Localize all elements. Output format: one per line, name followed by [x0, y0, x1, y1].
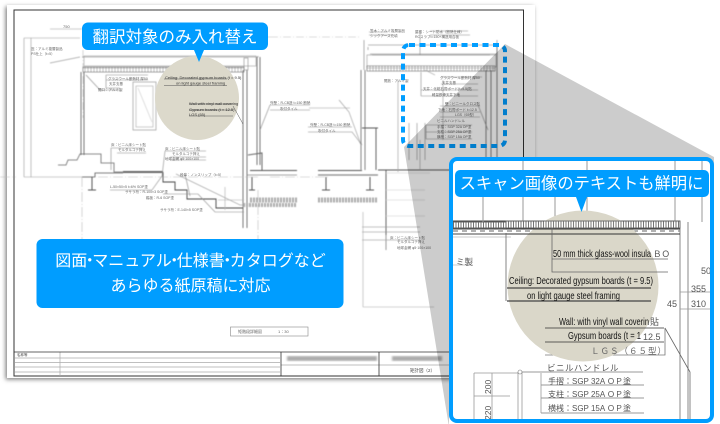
drawing labels: small text: 屋根：シート防水（断熱仕様） [415, 29, 464, 34]
drawing labels: small text: L-50×50×5 t=6% SOP塗 [110, 184, 148, 189]
drawing labels: small text: 笠木：アルミ複層製品 [370, 28, 405, 33]
drawing labels: small text: 踏板：R-6 SOP塗 [146, 195, 175, 200]
drawing labels: small text: 地球金網 φ5·100×100 [165, 156, 199, 161]
drawing labels: small text: 天井支基 [442, 80, 456, 85]
magnified panel [451, 159, 712, 421]
callout: translated text only: 翻訳対象のみ入れ替え [92, 28, 258, 46]
drawing labels: small text: 床：ビニル床シート貼 [165, 146, 200, 151]
drawing labels: small text: PS仕上（t=5） [31, 51, 55, 56]
tan circle: magnified: Wall: with vinyl wall coverin [559, 316, 649, 328]
callout: supports all paper documents: 図面・マニュアル・仕様書・カタログなど [55, 252, 326, 270]
drawing labels: small text [31, 24, 480, 334]
drawing labels: small text: 床：ビニル床シート貼 [390, 235, 425, 240]
magnification wedge [404, 44, 714, 424]
drawing labels: small text: 開放：アルミ製 [384, 78, 409, 83]
magnified labels: 355 [691, 284, 706, 294]
magnified labels: 45 [667, 299, 677, 309]
callout: scanned text stays sharp [455, 170, 709, 212]
title block: 名称等 [17, 352, 28, 357]
paper sheet [7, 5, 535, 378]
tan circle: magnified: ＬＧＳ（６５型） [591, 346, 667, 356]
drawing labels: small text: 支柱：SGP 25A OP塗 [437, 129, 472, 134]
magnified spot: left [155, 56, 243, 140]
drawing labels: small text: 750 [63, 24, 70, 29]
drawing labels: small text: ビニルハンドレル [437, 118, 465, 123]
drawing frame [14, 10, 524, 376]
magnified spot: left: Wall with vinyl wall covering [189, 101, 238, 106]
callout: scanned text stays sharp: スキャン画像のテキストも鮮明に [460, 175, 703, 193]
magnified labels: 200 [483, 380, 493, 394]
magnified labels: 50 [701, 266, 711, 276]
magnified drawing content [451, 160, 712, 421]
callout: supports all paper documents: あらゆる紙原稿に対応 [110, 277, 271, 295]
tan circle: magnified: ＢＯ [653, 249, 670, 259]
drawing labels: small text: 下地：石膏ボード t=12.5 [438, 107, 477, 112]
magnified spot: left: on light gauge steel framing [176, 80, 225, 86]
magnified labels: ビニルハンドレル [547, 363, 619, 373]
magnified labels [456, 257, 711, 420]
drawing labels: small text: 床：ビニル床シート貼 [111, 142, 146, 147]
tan circle: magnified: Ceiling: Decorated gypsum boards (t = 9.5) [509, 275, 653, 287]
drawing labels: small text: 天井：化粧石膏ボード(t=9.5)貼 [423, 86, 472, 91]
magnified labels: ミ製 [456, 257, 474, 267]
magnified labels: 支柱：SGP 25A ＯＰ塗 [548, 389, 631, 399]
drawing labels: small text: 横桟：SGP 15A OP塗 [437, 134, 472, 139]
drawing labels: small text: ササラ桁：E-140×5 SOP塗 [160, 207, 203, 212]
drawing labels: small text: モルタルコテ押え [172, 151, 200, 156]
blurred company names [287, 356, 442, 361]
drawing labels: small text: 開口：アルミ製 [98, 87, 123, 92]
table of dimensions [665, 328, 690, 421]
magnified spot: left: Ceiling: Decorated gypsum boards (t = 9.5) [165, 75, 242, 80]
title block [14, 352, 523, 376]
drawing labels: small text: 天井支基 [109, 81, 123, 86]
magnified labels: 手摺：SGP 32A ＯＰ塗 [548, 376, 631, 386]
drawing labels: small text: 手摺：SGP 32A OP塗 [437, 124, 472, 129]
tan circle: magnified: 50 mm thick glass-wool insula [553, 248, 651, 260]
drawing labels: small text: 外壁：R-CB造 t=150 断熱 [270, 100, 311, 105]
drawing labels: small text: 矩階段詳細図 1：30 [238, 328, 289, 334]
magnified spot: left: LGS (65) [189, 112, 206, 117]
drawing labels: small text: モルタルコテ押え [118, 147, 146, 152]
magnified labels: 横桟：SGP 15A ＯＰ塗 [548, 403, 631, 413]
drawing labels: small text: LGS（65型） [455, 112, 476, 117]
drawing labels: small text: グラスウール断熱材 厚50 [108, 76, 148, 81]
dashed highlight [403, 45, 505, 146]
drawing labels: small text: 外壁：R-CB造 t=150 断熱 [310, 122, 351, 127]
drawing labels: small text: 地球金網 φ5·100×100 [397, 245, 431, 250]
drawing labels: small text: 壁：ビニールクロス貼 [445, 101, 480, 106]
drawing labels: small text: 段鼻：ノンスリップ（t=5） [180, 172, 223, 177]
callout: translated text only [82, 22, 268, 62]
drawing labels: small text: 軽量鉄骨天井下地 [432, 92, 460, 97]
magnified labels: 310 [691, 299, 706, 309]
drawing labels: small text: 吹付タイル [280, 106, 298, 111]
sheet title box [230, 327, 308, 336]
section drawing: right [309, 31, 500, 307]
tan circle: magnified: 12.5 [643, 332, 661, 342]
title block: 矩計図（2） [410, 367, 435, 374]
stairs [58, 154, 123, 172]
drawing labels: small text: 吹付タイル [318, 128, 336, 133]
drawing labels: small text: グラスウール断熱材 厚50 [440, 75, 480, 80]
tan circle: magnified: 貼 [650, 316, 659, 327]
drawing labels: small text: シックアース充填 [370, 33, 398, 38]
magnified spot: left: Gypsum boards (t = 12.5) [189, 107, 235, 112]
section drawing: left [0, 29, 378, 300]
tan circle: magnified [506, 210, 680, 362]
callout: supports all paper documents [36, 239, 344, 308]
tan circle: magnified: Gypsum boards (t = 1 [568, 330, 641, 342]
magnified labels: 220 [483, 406, 493, 420]
drawing labels: small text: RCスラブt=150+構造用合板 [415, 34, 459, 39]
drawing labels: small text: ササラ桁：R-100×3 SOP塗 [125, 189, 168, 194]
panel border [451, 159, 712, 421]
drawing labels: small text: 庇：アルミ複層製品 [31, 46, 63, 51]
drawing labels: small text: モルタルコテ押え [397, 239, 425, 244]
tan circle: magnified: on light gauge steel framing [527, 290, 620, 302]
